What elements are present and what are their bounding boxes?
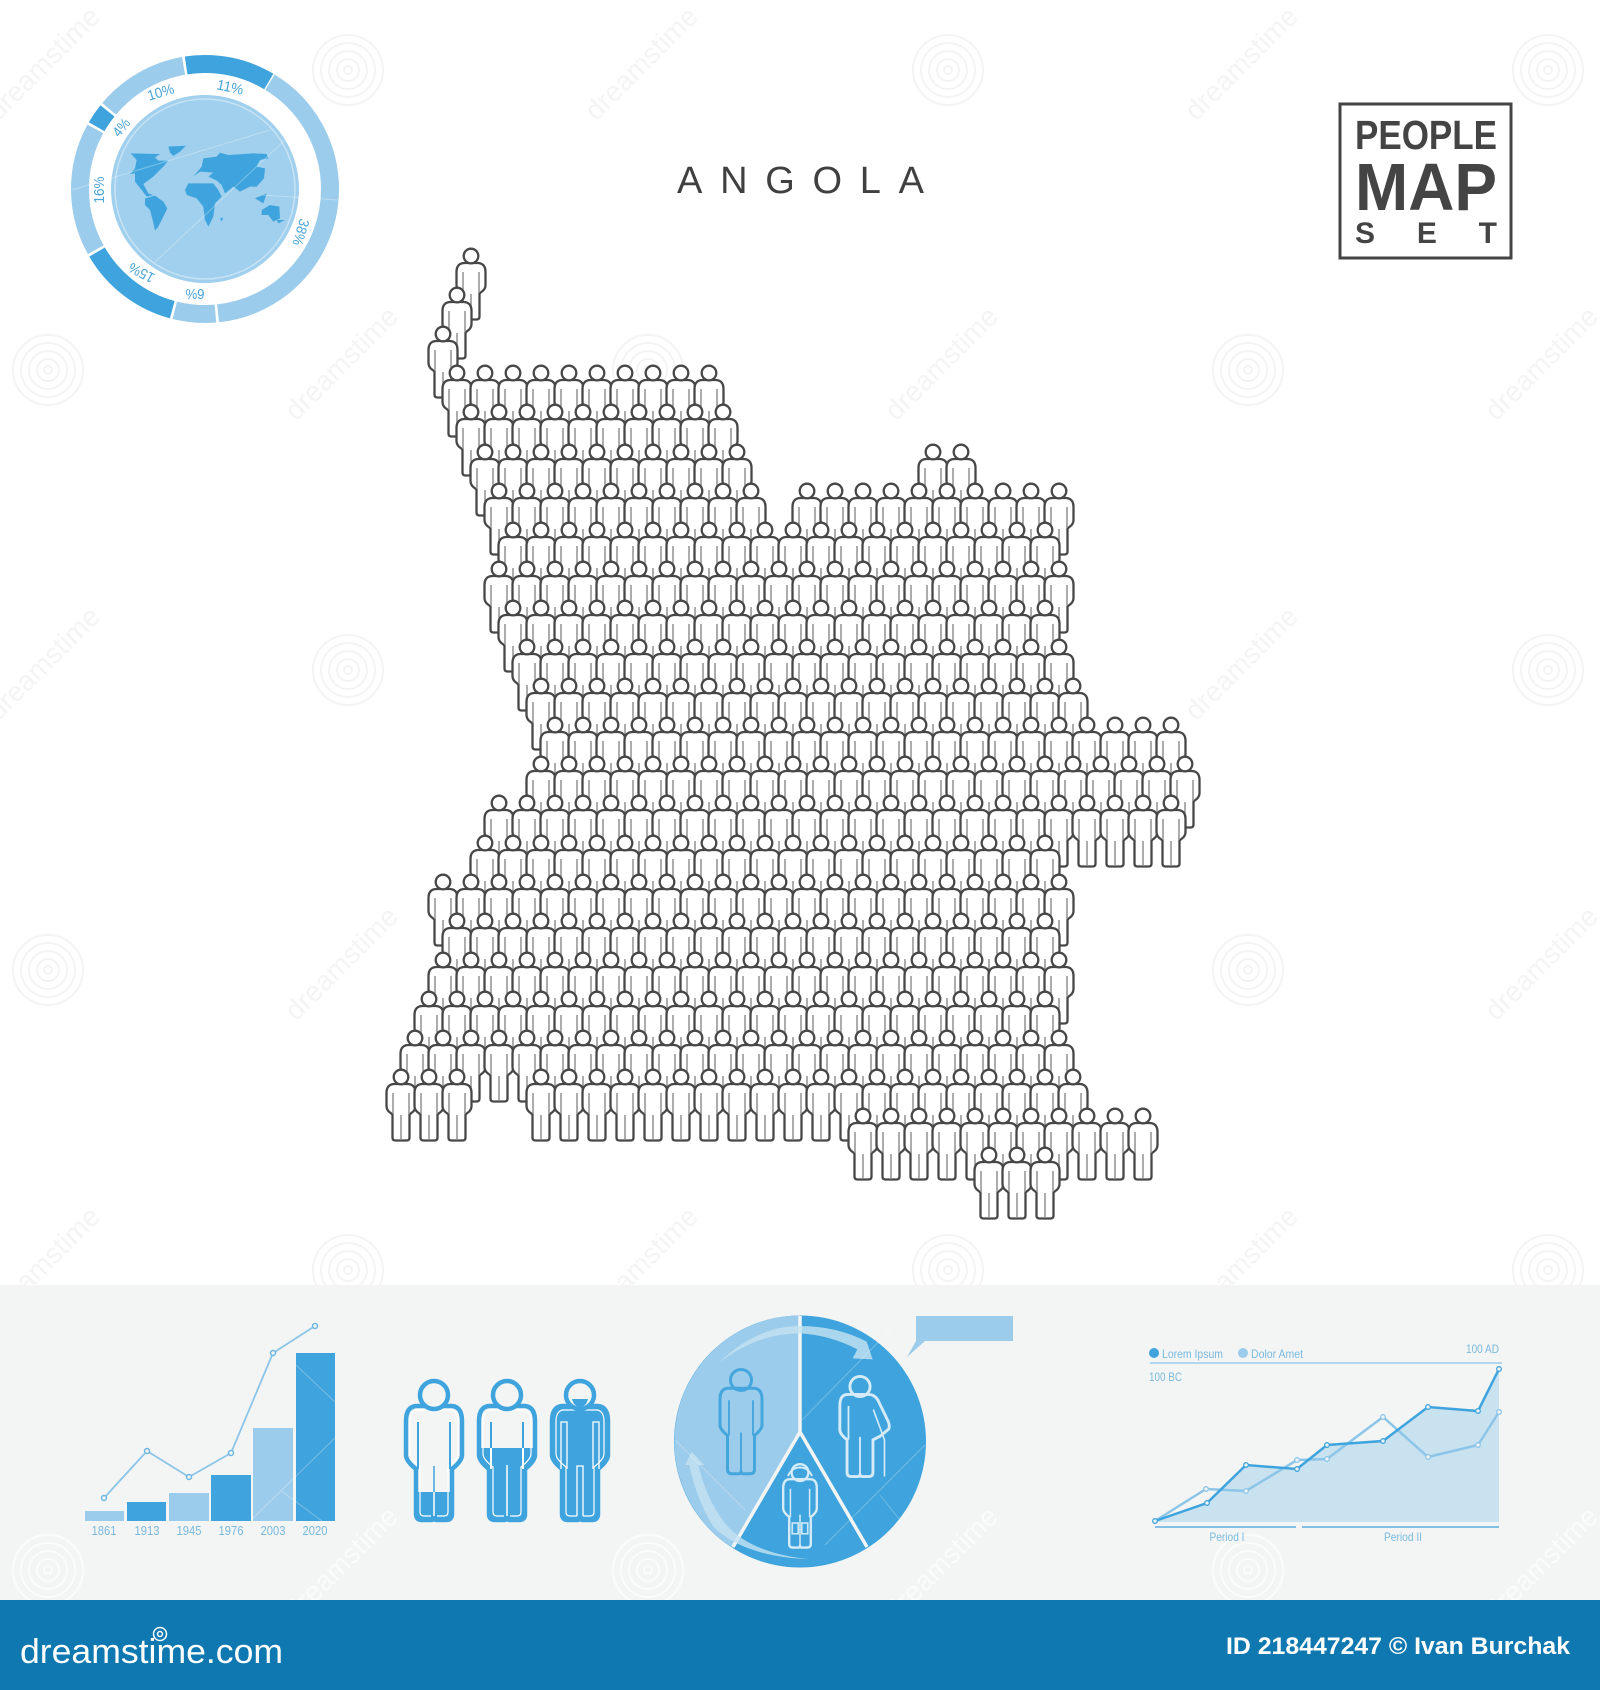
watermark pattern: dreamstime [1179, 1, 1304, 126]
icon: elder with cane [840, 1376, 889, 1477]
rows north [442, 366, 1088, 750]
legend: Lorem Ipsum [1162, 1347, 1223, 1361]
period brackets and labels: Period II [1384, 1530, 1422, 1544]
title: ANGOLA [677, 160, 925, 202]
donut percentage labels: 16% [92, 176, 108, 204]
period brackets and labels [1155, 1527, 1499, 1544]
people map of Angola [386, 249, 1200, 1218]
age pie chart [674, 1316, 1013, 1568]
pie slices [674, 1316, 926, 1568]
icon: child with headphones [783, 1464, 817, 1548]
donut percentage labels: 6% [185, 285, 204, 301]
donut percentage labels: 4% [110, 116, 134, 140]
dark series [1153, 1367, 1501, 1523]
rows centre [428, 718, 1200, 984]
watermark pattern: dreamstime [879, 901, 1004, 1026]
three filled person icons [404, 1381, 608, 1523]
population bar chart [85, 1324, 335, 1538]
year labels: 2003 [260, 1523, 286, 1538]
year labels: 2020 [302, 1523, 328, 1538]
inner globe disc [111, 95, 299, 283]
donut percentage labels: 15% [126, 259, 158, 285]
axis labels: 100 AD [1466, 1342, 1499, 1356]
light series [1155, 1410, 1501, 1521]
bars [85, 1353, 335, 1521]
footer band [0, 1600, 1600, 1690]
callout [907, 1316, 1013, 1357]
legend [1149, 1347, 1304, 1361]
year labels: 1861 [92, 1523, 116, 1538]
watermark pattern: dreamstime [279, 901, 404, 1026]
icon: adult [720, 1370, 762, 1474]
donut percentage labels: 38% [288, 217, 312, 247]
people map set logo [1340, 104, 1511, 258]
watermark pattern: dreamstime [579, 1201, 704, 1326]
axis labels [1149, 1342, 1499, 1384]
year labels: 1976 [218, 1523, 244, 1538]
watermark pattern: dreamstime [579, 1, 704, 126]
header rule [1150, 1362, 1502, 1364]
donut percentage labels: 11% [215, 77, 245, 99]
trend line [102, 1324, 318, 1500]
watermark pattern: dreamstime [879, 1501, 1004, 1626]
watermark pattern: dreamstime [279, 301, 404, 426]
world map icon [130, 146, 285, 231]
watermark lines over bars [253, 1365, 335, 1521]
watermark pattern: dreamstime [879, 301, 1004, 426]
people map set logo: MAP [1355, 150, 1497, 225]
donut chart with world map [72, 64, 338, 314]
axis labels: 100 BC [1149, 1370, 1182, 1384]
person icon: full fill [552, 1381, 608, 1520]
bottom panel [0, 1285, 1600, 1600]
donut ring segments [80, 64, 330, 314]
watermark lines over donut [72, 130, 338, 262]
watermark pattern: dreamstime [1179, 1201, 1304, 1326]
northern exclave figures [428, 249, 486, 398]
people map set logo: PEOPLE [1355, 112, 1497, 158]
donut percentage labels: 10% [146, 81, 176, 105]
year labels: 1913 [134, 1523, 160, 1538]
year labels: 1945 [176, 1523, 202, 1538]
legend: Dolor Amet [1251, 1347, 1304, 1361]
footer logo: dreamstime.com [20, 1633, 283, 1671]
period brackets and labels: Period I [1210, 1530, 1244, 1544]
person icon: half fill [477, 1381, 537, 1523]
footer credit: ID 218447247 © Ivan Burchak [1226, 1633, 1571, 1660]
watermark lines over pie [675, 1325, 925, 1545]
person icon: low fill [404, 1381, 464, 1522]
watermark pattern: dreamstime [1179, 601, 1304, 726]
arrow bottom [685, 1452, 810, 1559]
donut percentage labels [92, 77, 312, 301]
people map set logo: SET [1355, 217, 1497, 250]
area fill [1155, 1369, 1499, 1522]
arrow top [718, 1326, 873, 1363]
rows south [386, 953, 1158, 1218]
line and area chart [1149, 1342, 1502, 1544]
watermark pattern: dreamstime [579, 601, 704, 726]
watermark pattern: dreamstime [279, 1501, 404, 1626]
year labels [92, 1523, 328, 1538]
